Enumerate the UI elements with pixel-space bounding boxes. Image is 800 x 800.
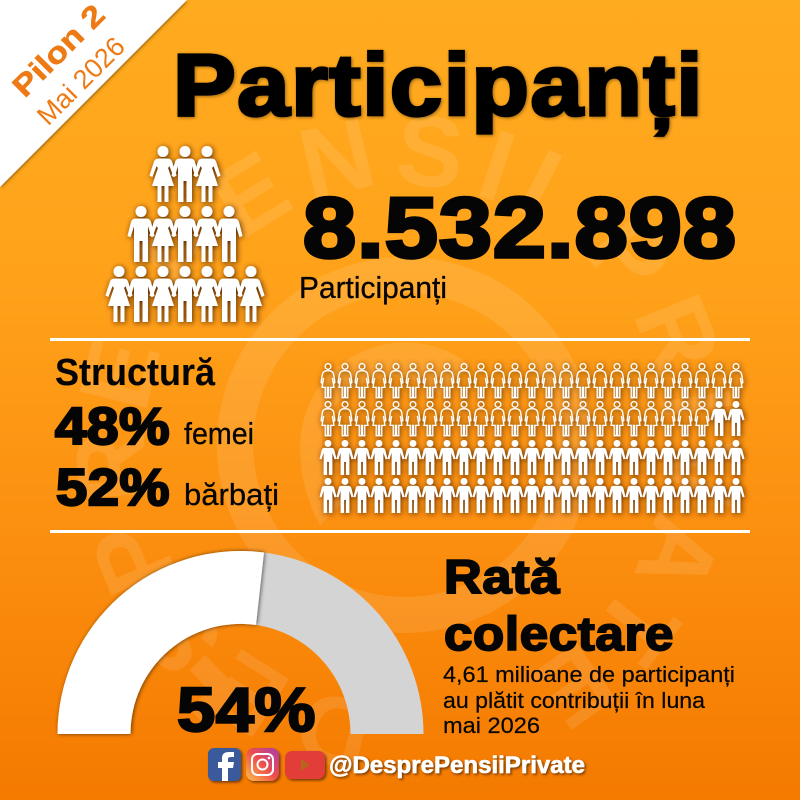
description line 2: au plătit contribuții în luna	[443, 688, 706, 713]
panel: structure text	[55, 352, 279, 517]
heading: Structură: Structură	[55, 352, 216, 394]
watermark logo: DESPRE PENSII PRIVATE	[76, 116, 734, 771]
women label: femei	[184, 416, 254, 451]
handle: @DesprePensiiPrivate	[329, 752, 585, 779]
icon: crowd pyramid	[106, 146, 264, 322]
men percentage: 52%	[56, 459, 170, 517]
divider bottom	[50, 530, 750, 533]
pictogram chart: gender structure	[320, 364, 744, 513]
title: Participanți	[173, 37, 704, 135]
heading line 2: colectare	[444, 607, 674, 660]
divider top	[50, 338, 750, 341]
corner ribbon	[0, 0, 187, 187]
ribbon label: date: Mai 2026	[31, 31, 131, 131]
icon: youtube	[285, 751, 325, 779]
description line 1: 4,61 milioane de participanți	[443, 662, 735, 687]
men label: bărbați	[184, 477, 279, 512]
panel: collection rate text	[443, 550, 735, 738]
icon: facebook	[208, 748, 241, 781]
gauge value	[58, 551, 264, 734]
gauge percentage: 54%	[177, 676, 316, 745]
description line 3: mai 2026	[443, 713, 540, 738]
gauge remainder	[256, 552, 424, 734]
participants caption: Participanți	[299, 270, 447, 305]
icon: instagram	[246, 748, 279, 781]
total participants number: 8.532.898	[303, 181, 737, 276]
ribbon shape	[0, 0, 187, 187]
gauge chart: 54%	[58, 551, 424, 734]
women percentage: 48%	[55, 398, 170, 456]
social footer	[208, 748, 585, 781]
ribbon label: Pilon 2: Pilon 2	[6, 0, 112, 104]
heading line 1: Rată	[444, 550, 560, 603]
